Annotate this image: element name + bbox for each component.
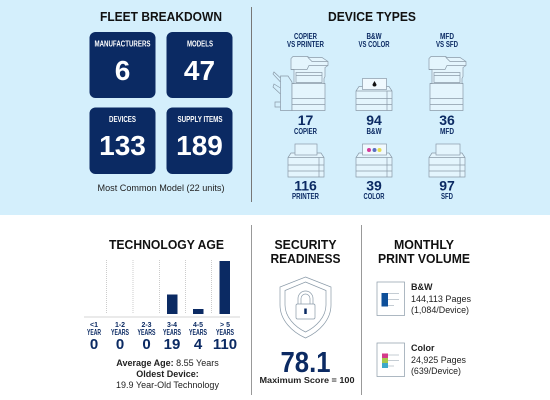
age bin: over 5 years [213,322,237,353]
heading: security readiness: SECURITY [274,237,337,252]
stat: sfd [439,178,455,201]
age bin: 1-2 years: 0 [116,336,124,353]
age bin: 1-2 years [111,322,129,353]
panel: device types [273,9,466,201]
age bin: over 5 years: YEARS [216,328,234,337]
panel: technology age [84,237,240,390]
icon: b&w printer [356,78,392,110]
age bin: 3-4 years: 3-4 [167,322,177,329]
heading: security readiness [270,237,341,266]
tile: supply items: SUPPLY ITEMS [178,115,223,124]
heading: device types: DEVICE TYPES [328,9,416,24]
stat: mfd: MFD [440,127,454,136]
stat: color [364,178,385,201]
heading: monthly print volume: MONTHLY [394,237,454,252]
heading: monthly print volume [378,237,470,266]
column header: mfd vs sfd [436,32,458,49]
heading: monthly print volume: PRINT VOLUME [378,251,470,266]
column header: copier vs printer [287,32,324,49]
heading: technology age: TECHNOLOGY AGE [109,237,224,252]
age bin: 2-3 years: YEARS [138,328,156,337]
tile: manufacturers: MANUFACTURERS [94,40,151,48]
age bin: over 5 years: > 5 [220,322,230,329]
age bin: 2-3 years [138,322,156,353]
summary: average age and oldest device: Oldest Device: [136,369,199,379]
tile: devices [90,108,156,174]
age bin: 1-2 years: 1-2 [115,322,125,329]
column header: b&w vs color [358,32,390,49]
text: color volume: 24,925 Pages [411,355,466,365]
age bin: 4-5 years: 4 [194,336,203,353]
stat: copier: COPIER [294,127,317,136]
icon: color printer [356,144,392,177]
stat: mfd [439,112,455,136]
age bin: 4-5 years [189,322,207,353]
column header: mfd vs sfd: VS SFD [436,40,458,49]
stat: b&w: B&W [366,127,382,136]
note: maximum score: Maximum Score = 100 [260,375,355,385]
column header: mfd vs sfd: MFD [440,32,454,41]
text: b&w volume: 144,113 Pages [411,294,471,304]
note: most common model: Most Common Model (22 units) [98,183,224,194]
stat: printer: 116 [294,178,317,194]
text: b&w volume: B&W [411,282,433,292]
age bin: 4-5 years: YEARS [189,328,207,337]
stat: copier [294,112,317,136]
panel: security readiness [260,237,355,385]
icon: b&w document [377,282,404,316]
column header: copier vs printer: VS PRINTER [287,40,324,49]
age bin: over 5 years: 110 [213,336,237,353]
icon: sfd printer [429,144,465,177]
age bin: 1-2 years: YEARS [111,328,129,337]
bar chart: device age [84,260,240,317]
text: color volume: (639/Device) [411,366,461,376]
text: b&w volume [411,282,471,315]
tile: devices: DEVICES [109,115,137,124]
age bin: under 1 year: 0 [90,336,98,353]
age bin: 3-4 years [163,322,181,353]
tile: supply items [166,108,232,174]
age bin: 4-5 years: 4-5 [193,322,203,329]
summary: average age and oldest device [116,358,219,390]
text: color volume: Color [411,343,435,353]
tile: supply items: 189 [176,130,223,161]
column header: copier vs printer: COPIER [294,32,317,41]
stat: printer: PRINTER [292,192,319,201]
tile: manufacturers: 6 [115,55,130,86]
icon: copier with finisher [273,56,328,110]
stat: color: COLOR [364,192,385,201]
icon: color document [377,343,404,376]
tile: manufacturers [90,32,156,98]
score: 78.1: 78.1 [280,347,330,379]
age bin: 2-3 years: 2-3 [141,322,152,329]
summary: average age and oldest device: 19.9 Year-Old Technology [116,380,219,390]
tile: devices: 133 [99,130,146,161]
text: b&w volume: (1,084/Device) [411,305,469,315]
age bin: 3-4 years: YEARS [163,328,181,337]
top background panel [0,0,550,215]
icon: printer [288,144,324,177]
stat: b&w: 94 [366,112,382,128]
panel: fleet breakdown [90,9,232,194]
heading: security readiness: READINESS [270,251,341,266]
age bin: under 1 year: <1 [90,322,98,329]
stat: b&w [366,112,382,136]
icon: shield with padlock [280,277,331,338]
tile: models [166,32,232,98]
stat: copier: 17 [298,112,313,128]
stat: color: 39 [366,178,382,194]
stat: printer [292,178,319,201]
age bin: 3-4 years: 19 [164,336,180,353]
tile: models: 47 [184,55,215,86]
column header: b&w vs color: B&W [366,32,382,41]
age bin: under 1 year: YEAR [87,328,101,337]
heading: fleet breakdown: FLEET BREAKDOWN [100,9,222,24]
age bin: under 1 year [87,322,101,353]
panel: monthly print volume [377,237,471,376]
stat: mfd: 36 [439,112,455,128]
summary: average age and oldest device: Average Age: 8.55 Years [116,358,219,368]
stat: sfd: 97 [439,178,455,194]
icon: mfd [429,56,466,110]
column header: b&w vs color: VS COLOR [358,40,390,49]
stat: sfd: SFD [441,192,453,201]
age bin: 2-3 years: 0 [142,336,151,353]
tile: models: MODELS [187,40,213,48]
text: color volume [411,343,466,376]
